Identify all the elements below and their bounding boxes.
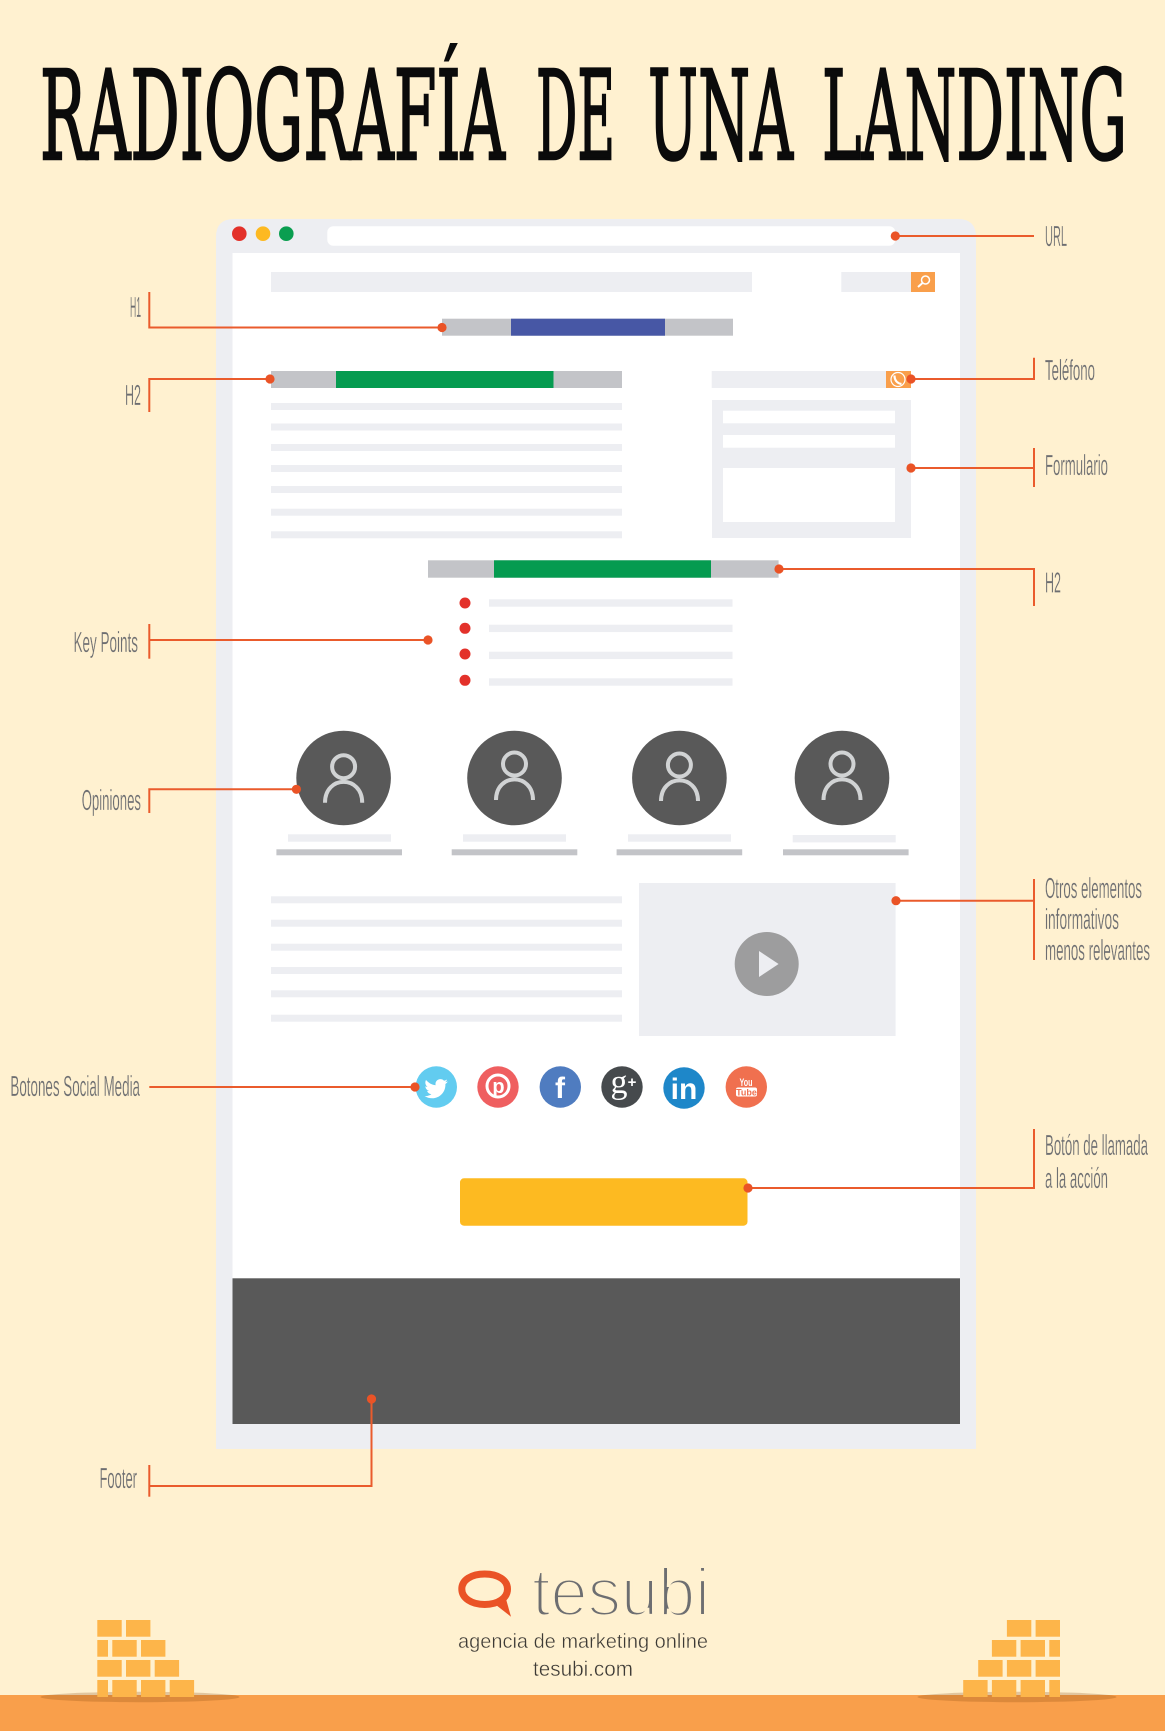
video player — [639, 883, 896, 1036]
header bar — [271, 272, 752, 292]
bricks left — [40, 1620, 240, 1702]
center H2 bar — [428, 560, 779, 578]
icon: twitter — [416, 1066, 457, 1108]
icon: linkedin — [663, 1067, 705, 1109]
callout: H2 right — [774, 564, 1061, 606]
icon: google plus: g — [610, 1064, 628, 1101]
text: Teléfono — [1045, 355, 1095, 387]
browser window — [216, 219, 976, 1449]
text: H2 — [1045, 568, 1061, 600]
tagline: agencia de marketing online — [458, 1631, 708, 1653]
website: tesubi.com — [533, 1658, 633, 1681]
opinion 2 — [452, 731, 577, 855]
footer block — [232, 1278, 960, 1424]
icon: facebook — [540, 1066, 581, 1108]
icon: linkedin: in — [671, 1073, 697, 1106]
callout: Opiniones: Opiniones — [82, 785, 141, 817]
icon: google plus: + — [628, 1074, 637, 1091]
page area — [232, 253, 960, 1424]
ground band — [0, 1695, 1165, 1731]
icon: google plus — [601, 1064, 643, 1108]
left H2 bar — [271, 371, 622, 388]
icon: youtube — [726, 1066, 767, 1108]
window buttons — [232, 226, 294, 241]
callout: Opiniones — [82, 785, 301, 817]
H1 bar — [442, 319, 733, 336]
callout: Formulario — [906, 448, 1108, 487]
callout: H1 — [130, 292, 447, 332]
callout: Teléfono — [906, 355, 1095, 387]
icon: youtube: Tube — [736, 1088, 757, 1098]
callout: Footer: Footer — [100, 1463, 137, 1495]
browser frame — [216, 219, 976, 1449]
form — [712, 400, 911, 538]
title: UNA — [648, 45, 794, 189]
text lines lower — [271, 896, 622, 1022]
callout: H2 left — [125, 374, 275, 412]
address bar — [327, 226, 895, 246]
icon: pinterest: p — [492, 1076, 505, 1098]
bricks right — [918, 1620, 1116, 1702]
icon: pinterest — [477, 1066, 519, 1108]
brand name: tesubi — [532, 1555, 710, 1631]
callout: H2 left: H2 — [125, 380, 141, 412]
callout: Otros elementos informativos menos relevantes — [891, 873, 1150, 967]
title: RADIOGRAFÍA — [40, 44, 506, 189]
icon: speech bubble — [462, 1574, 511, 1617]
callout: URL — [891, 221, 1067, 253]
opinion 3 — [617, 731, 742, 855]
opinion 4 — [783, 731, 909, 855]
icon: youtube: You — [740, 1077, 752, 1089]
callout: Botones Social Media — [10, 1071, 420, 1103]
text: URL — [1045, 221, 1067, 253]
social buttons — [416, 1064, 767, 1109]
title: DE — [536, 45, 615, 189]
callout: Botones Social Media: Botones Social Media — [10, 1071, 140, 1103]
opinion 1 — [276, 731, 402, 855]
callout: Key Points: Key Points — [74, 627, 138, 659]
callout: Key Points — [74, 624, 433, 659]
logo: tesubi — [458, 1555, 710, 1681]
callout: Botón de llamada a la acción — [743, 1129, 1148, 1195]
callout: Footer — [100, 1394, 376, 1497]
icon: facebook: f — [555, 1072, 566, 1105]
paragraph lines — [271, 403, 622, 538]
search box — [841, 272, 935, 292]
call to action button — [460, 1178, 748, 1226]
key points list — [460, 598, 732, 686]
callout: H1: H1 — [130, 292, 141, 324]
phone bar — [712, 371, 911, 388]
